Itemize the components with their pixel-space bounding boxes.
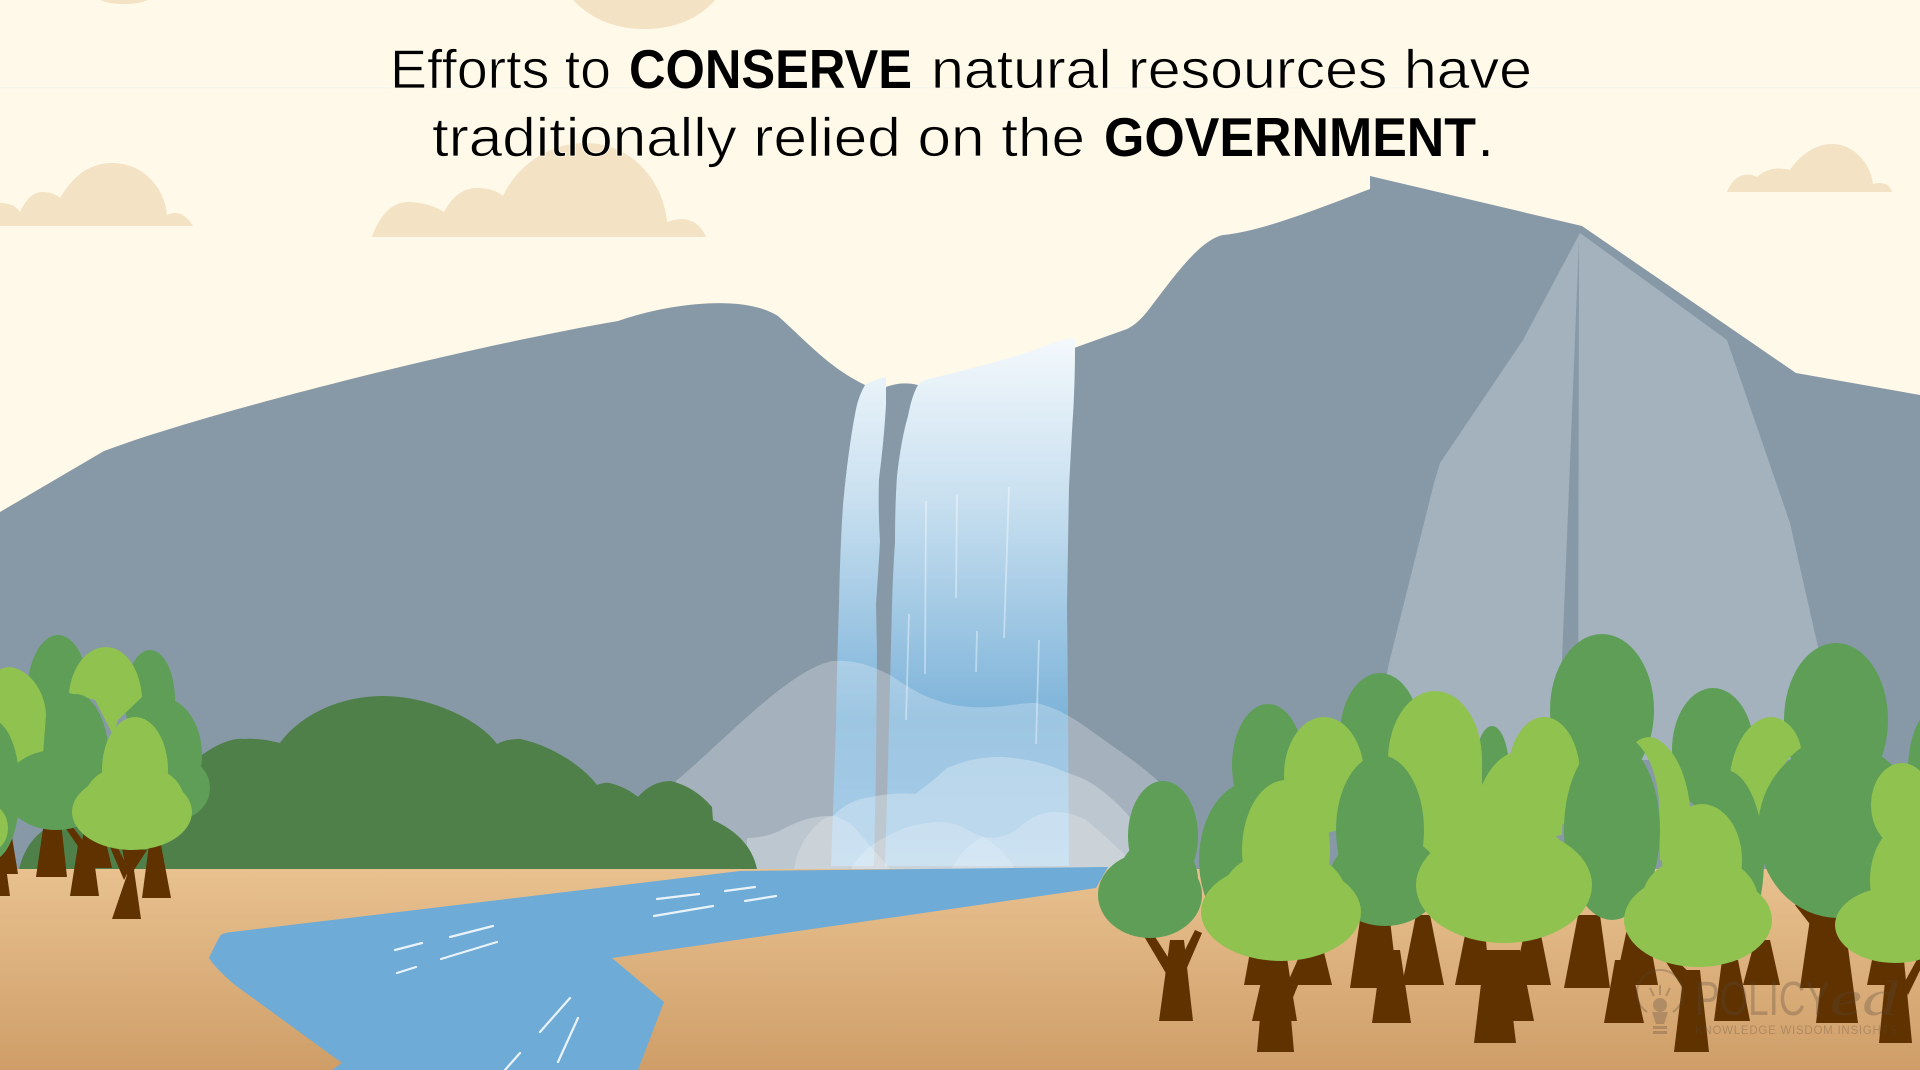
title: natural resources have [931, 38, 1532, 100]
canopies front mid green [1329, 740, 1920, 950]
title: traditionally relied on the [432, 106, 1085, 168]
waterfall [831, 338, 1075, 866]
river [209, 867, 1108, 1070]
tree trunks left [0, 818, 171, 919]
ground [0, 869, 1920, 1070]
title: . [1478, 106, 1493, 168]
title: CONSERVE [629, 38, 912, 100]
background bush [19, 696, 757, 869]
trees: right cluster [1098, 634, 1920, 1052]
trees: left cluster [0, 635, 210, 919]
mountains [0, 176, 1920, 880]
title: Efforts to [390, 38, 611, 100]
river ripples [395, 887, 776, 1070]
waterfall mist [640, 661, 1170, 869]
canopies back mid green [1098, 634, 1920, 940]
tree trunks right [1142, 900, 1920, 1052]
logo wordmark: POLICY [1695, 973, 1830, 1026]
title: GOVERNMENT [1104, 106, 1476, 168]
logo wordmark ed: ed [1830, 970, 1899, 1026]
canopies light green slivers [1280, 691, 1801, 870]
mountain light rock face [1370, 233, 1835, 760]
canopies light green left [0, 647, 142, 773]
canopies front light green [1201, 745, 1920, 967]
icon: light bulb [1637, 970, 1683, 1034]
canopies front light green left [0, 717, 192, 853]
canopies mid green left [27, 635, 175, 755]
title [390, 38, 1532, 168]
clouds [0, 0, 1892, 237]
logo tagline: KNOWLEDGE WISDOM INSIGHTS [1695, 1025, 1897, 1037]
canopies front mid green left [0, 694, 210, 860]
watermark logo [1637, 970, 1899, 1037]
